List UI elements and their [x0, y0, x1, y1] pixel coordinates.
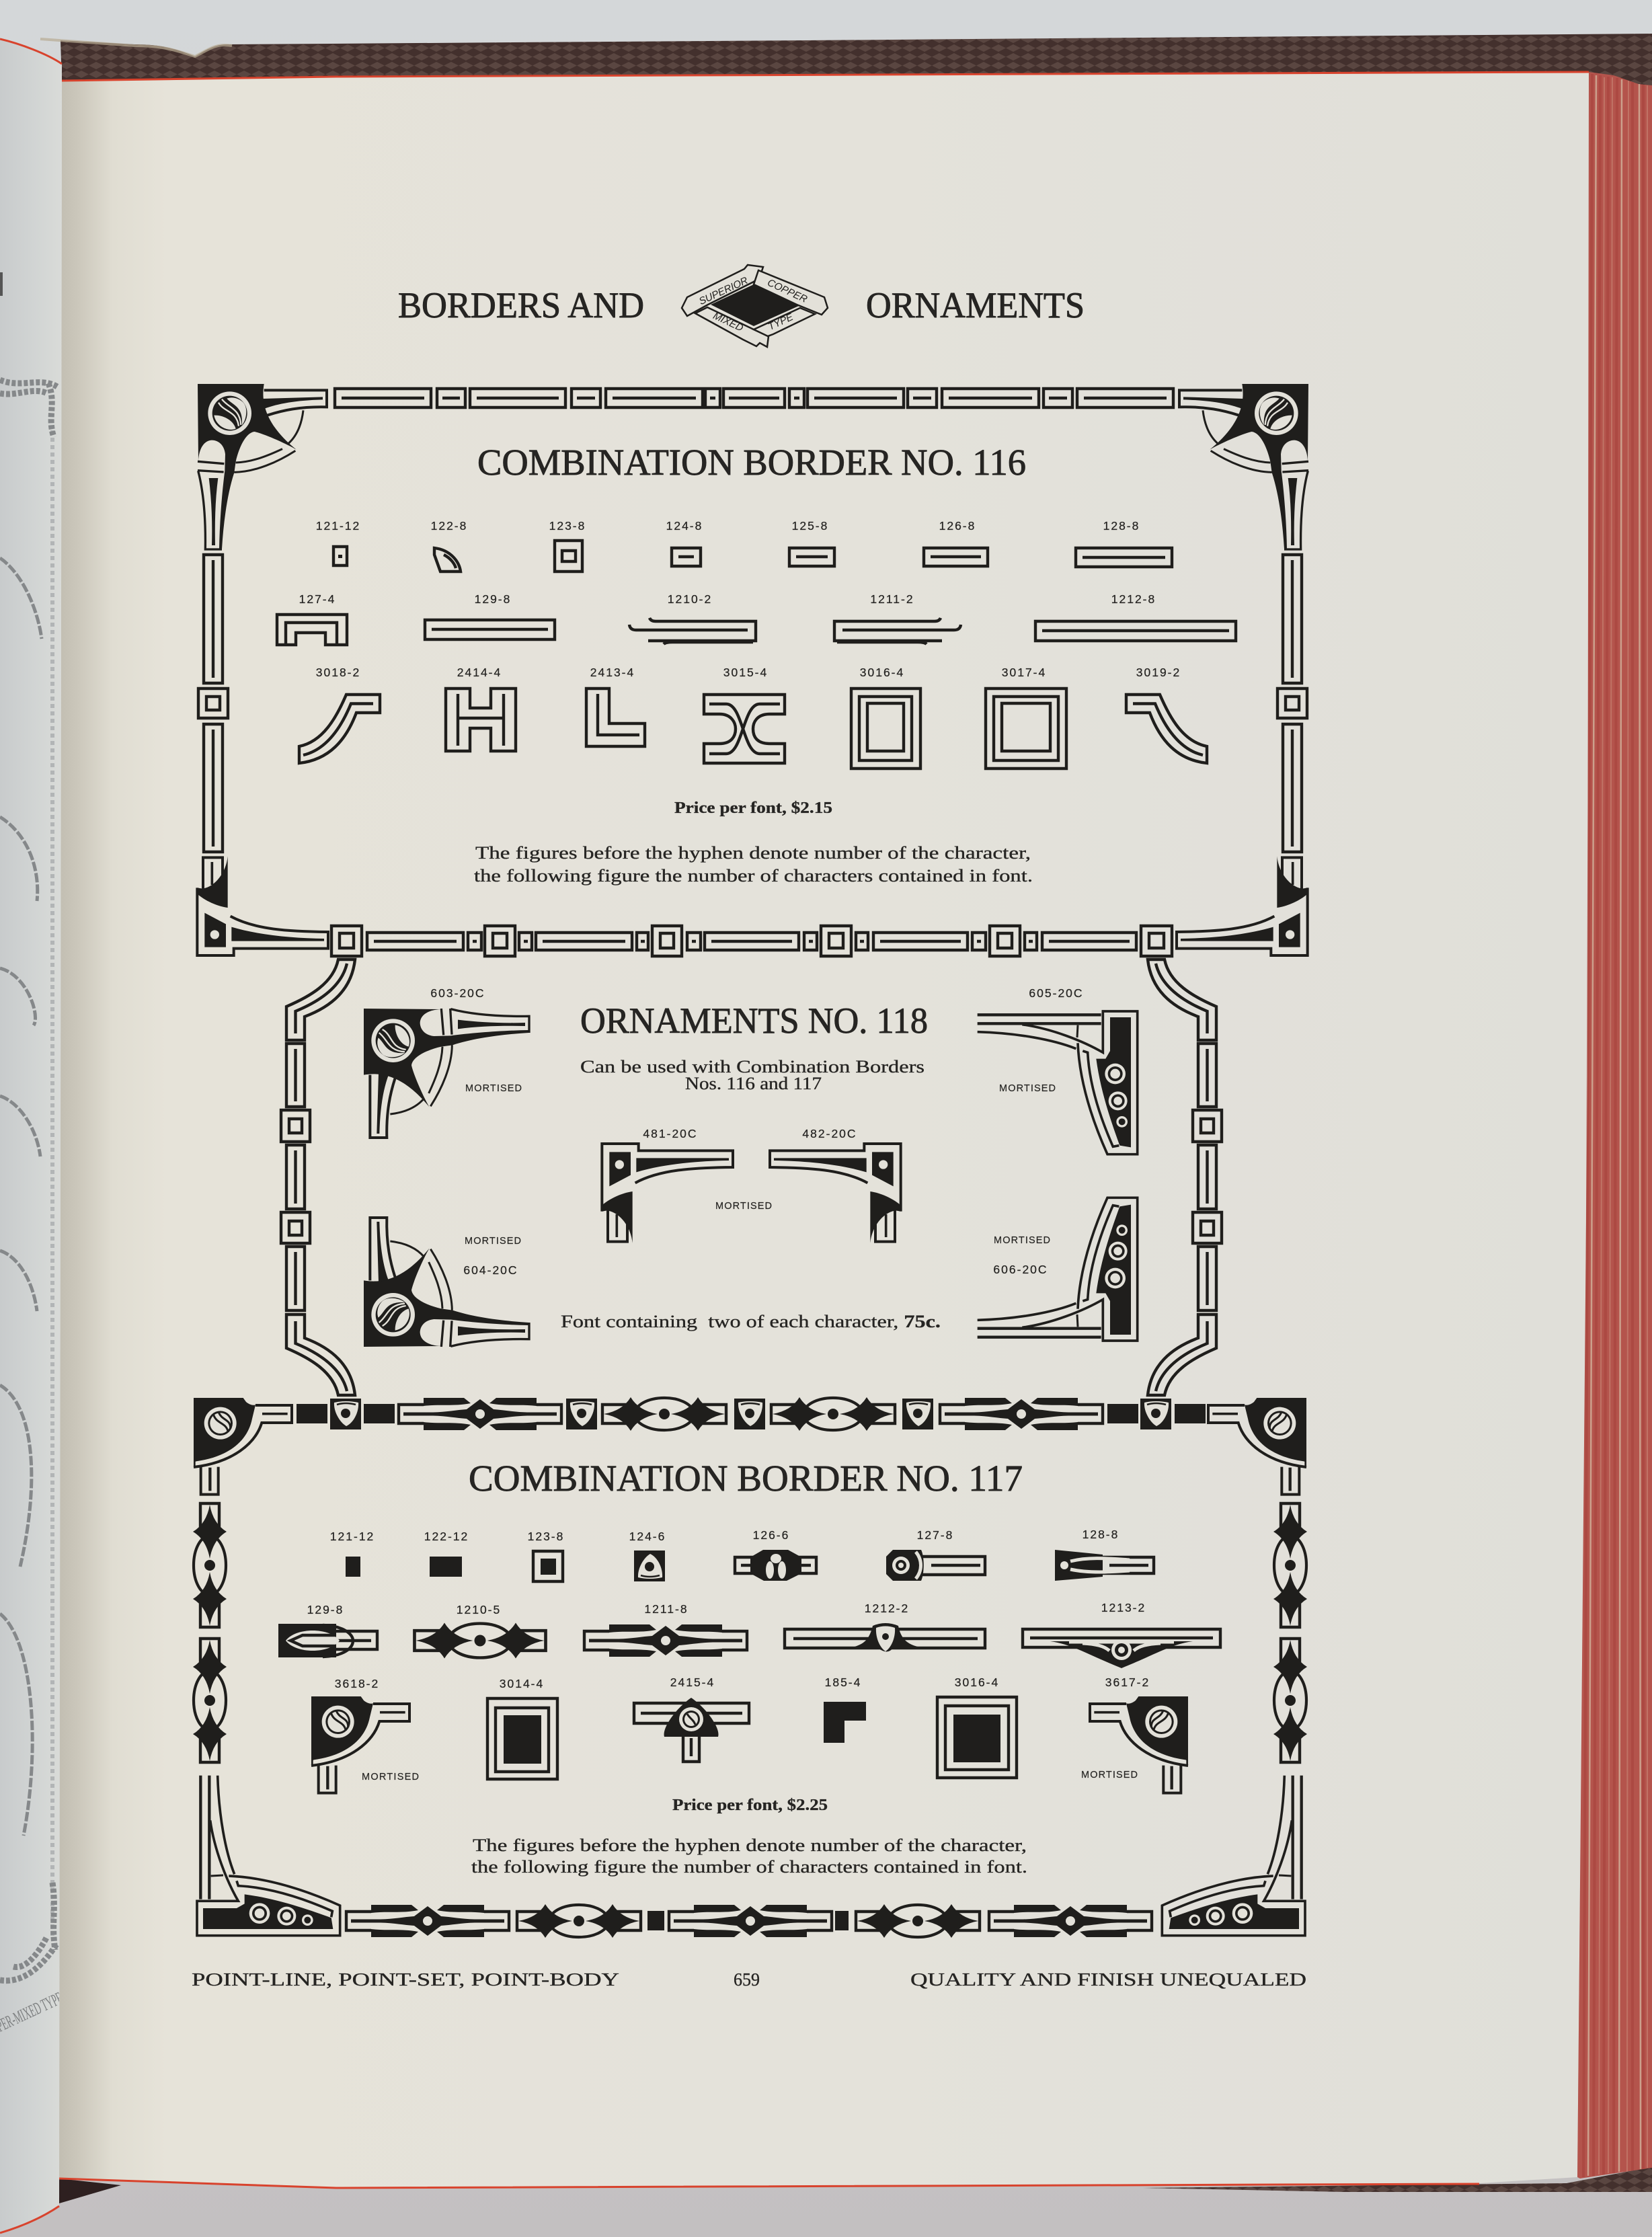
specimen labels: 118 — [430, 986, 1084, 1277]
heading: combination border no. 117: COMBINATION BORDER NO. 117 — [469, 1458, 1023, 1499]
icon: 117 bottom left corner — [197, 1776, 340, 1936]
specimen labels: 118: 481-20C — [643, 1127, 698, 1140]
specimen labels: 116: 129-8 — [475, 592, 511, 606]
specimen labels: 117: 3016-4 — [955, 1676, 999, 1689]
specimen labels: 118: 606-20C — [993, 1263, 1048, 1276]
specimen labels: 116: 122-8 — [431, 519, 467, 533]
book cover cloth, bottom edge — [1143, 2166, 1652, 2192]
specimen labels: 116: 3018-2 — [316, 666, 360, 679]
specimen labels: 117: 127-8 — [917, 1528, 953, 1542]
heading: ornaments: ORNAMENTS — [866, 285, 1085, 325]
heading: ornaments no. 118: ORNAMENTS NO. 118 — [580, 1000, 928, 1041]
text: usage note: Nos. 116 and 117 — [685, 1074, 822, 1093]
mortised labels: 117: MORTISED — [362, 1772, 419, 1782]
text: 116 price: Price per font, $2.15 — [674, 799, 832, 817]
specimen labels: 118: MORTISED — [465, 1083, 522, 1094]
specimen row 2: 116 border characters — [277, 615, 1236, 645]
specimen labels: 117: 121-12 — [330, 1530, 375, 1543]
specimen labels: 117: 1212-2 — [865, 1602, 909, 1615]
specimen labels: 118: 604-20C — [463, 1263, 518, 1277]
specimen labels: 117: 126-6 — [753, 1528, 789, 1542]
text: 116 explanatory note: The figures before the hyphen denote number of the character, — [475, 843, 1031, 863]
text: 117 price: Price per font, $2.25 — [672, 1797, 828, 1814]
icon: superior copper mixed type ribbon logo — [682, 265, 828, 347]
specimen row 2: 117 border characters — [278, 1623, 1220, 1668]
panel: combination border 117 frame — [193, 1397, 1307, 1938]
specimen labels: 117: 123-8 — [528, 1530, 564, 1543]
specimen labels: 116: 128-8 — [1103, 519, 1140, 533]
117 top border band — [297, 1397, 1206, 1431]
specimen labels: 118: MORTISED — [465, 1236, 521, 1247]
fore-edge of the book pages — [1577, 72, 1652, 2179]
specimen labels: 116: 3019-2 — [1136, 666, 1181, 679]
117 right border column — [1273, 1503, 1307, 1762]
117 left border column — [193, 1503, 227, 1762]
specimen labels: 116: 125-8 — [792, 519, 828, 533]
icon: 117 top right corner — [1208, 1398, 1306, 1495]
mortised labels: 117: MORTISED — [1081, 1770, 1138, 1780]
specimen labels: 117: 2415-4 — [670, 1676, 715, 1689]
specimen labels: 118: MORTISED — [994, 1235, 1050, 1246]
116 bottom border band — [331, 926, 1172, 956]
specimen row 1: 116 border characters — [333, 541, 1172, 572]
specimen labels: 118: 605-20C — [1029, 986, 1084, 1000]
specimen labels: 116: 127-4 — [299, 592, 336, 606]
icon: 117 top left corner — [194, 1398, 292, 1495]
text: 117 explanatory note: The figures before the hyphen denote number of the character, — [473, 1836, 1027, 1855]
text: 117 explanatory note — [471, 1836, 1027, 1877]
specimen labels: 117: 129-8 — [307, 1603, 344, 1616]
left facing page — [0, 39, 66, 2233]
117 bottom border band — [346, 1904, 1152, 1938]
specimen labels: 117: 122-12 — [424, 1530, 469, 1543]
icon: ornament 604 — [364, 1218, 529, 1347]
text: font price 118: Font containing two of each character, 75c. — [561, 1312, 941, 1331]
icon: superior copper mixed type ribbon logo: MIXED — [711, 310, 745, 334]
specimen labels: 117: 1210-5 — [457, 1603, 501, 1616]
icon: 117 bottom right corner — [1162, 1776, 1305, 1936]
icon: 116 bottom right corner — [1177, 856, 1308, 955]
text: 117 explanatory note: the following figure the number of characters contained in font. — [471, 1857, 1027, 1877]
book cover cloth, top edge — [40, 34, 1652, 87]
specimen labels: 116: 3017-4 — [1002, 666, 1046, 679]
specimen labels: 117: 1213-2 — [1101, 1601, 1146, 1614]
icon: ornament 603 — [364, 1009, 529, 1138]
icon: ornament 481 — [602, 1144, 733, 1243]
footer: 659 — [734, 1969, 760, 1990]
specimen labels: 116: 126-8 — [939, 519, 976, 533]
text: usage note — [580, 1057, 925, 1093]
specimen labels: 117: 3014-4 — [500, 1677, 544, 1690]
footer: QUALITY AND FINISH UNEQUALED — [910, 1969, 1306, 1990]
icon: superior copper mixed type ribbon logo: COPPER — [766, 277, 809, 305]
icon: 116 top left corner — [198, 384, 327, 549]
specimen labels: 117: 3617-2 — [1105, 1676, 1150, 1689]
specimen labels: 117: 3618-2 — [335, 1677, 379, 1690]
icon: superior copper mixed type ribbon logo: TYPE — [766, 311, 795, 333]
panel: ornaments 118 side frame — [281, 959, 1222, 1395]
specimen labels: 117: 128-8 — [1083, 1528, 1119, 1541]
specimen labels: 116: 124-8 — [666, 519, 703, 533]
specimen row 3: 117 border characters — [311, 1696, 1188, 1793]
text: usage note: Can be used with Combination Borders — [580, 1057, 925, 1076]
book cover shadow at bottom gutter — [59, 2179, 121, 2203]
specimen labels: 117 — [307, 1528, 1150, 1690]
specimen labels: 116: 3015-4 — [723, 666, 768, 679]
mortised labels: 117 — [362, 1770, 1138, 1782]
heading: borders and: BORDERS AND — [398, 285, 644, 325]
icon: ornament 482 — [770, 1144, 901, 1243]
specimen labels: 118: MORTISED — [715, 1201, 772, 1212]
specimen labels: 116: 1212-8 — [1111, 592, 1156, 606]
specimen row 1: 117 border characters — [346, 1550, 1154, 1581]
specimen labels: 116: 123-8 — [549, 519, 586, 533]
footer: POINT-LINE, POINT-SET, POINT-BODY — [192, 1969, 619, 1990]
icon: ornament 605 — [978, 1011, 1138, 1154]
specimen labels: 118: MORTISED — [999, 1083, 1056, 1094]
specimen labels: 116: 1211-2 — [870, 592, 914, 606]
specimen labels: 117: 185-4 — [825, 1676, 861, 1689]
specimen labels: 116: 121-12 — [316, 519, 360, 533]
footer — [192, 1969, 1306, 1990]
specimen labels: 116: 2413-4 — [590, 666, 635, 679]
text: 116 explanatory note: the following figure the number of characters contained in font. — [474, 866, 1033, 886]
icon: 116 bottom left corner — [197, 856, 328, 955]
116 right border column — [1277, 555, 1307, 852]
specimen labels: 116: 2414-4 — [457, 666, 502, 679]
specimen labels: 118: 603-20C — [430, 986, 485, 1000]
icon: superior copper mixed type ribbon logo: SUPERIOR — [697, 275, 750, 307]
116 left border column — [198, 555, 228, 852]
specimen labels: 116 — [299, 519, 1181, 679]
116 top border band — [335, 389, 1173, 407]
heading: combination border no. 116: COMBINATION BORDER NO. 116 — [477, 442, 1026, 483]
icon: 116 top right corner — [1179, 384, 1308, 549]
specimen labels: 116: 1210-2 — [668, 592, 712, 606]
text: 116 explanatory note — [474, 843, 1033, 886]
panel: combination border 116 frame — [197, 384, 1308, 956]
specimen labels: 116: 3016-4 — [860, 666, 904, 679]
specimen row 3: 116 border characters — [299, 689, 1207, 769]
specimen labels: 117: 124-6 — [629, 1530, 666, 1543]
specimen labels: 117: 1211-8 — [644, 1602, 689, 1616]
icon: ornament 606 — [978, 1198, 1138, 1341]
specimen labels: 118: 482-20C — [802, 1127, 857, 1140]
